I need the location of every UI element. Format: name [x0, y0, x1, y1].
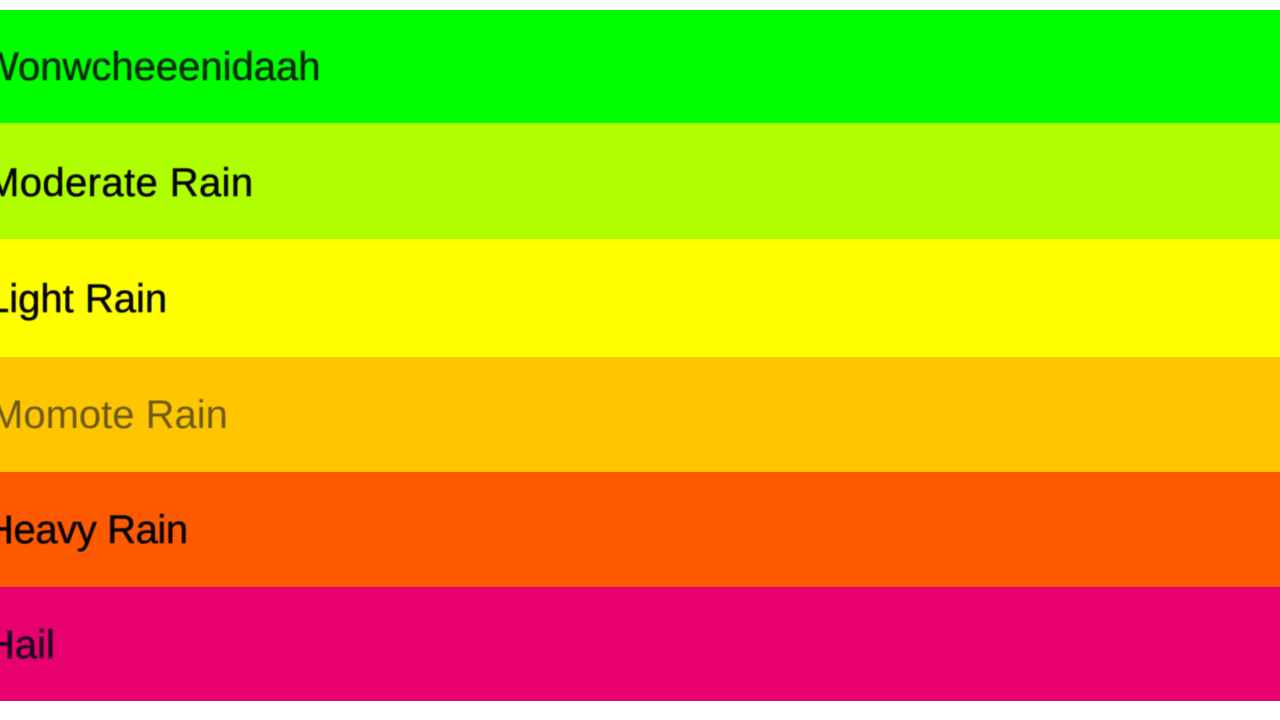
legend band: very light rain [0, 10, 1280, 123]
legend band: momote rain [0, 357, 1280, 472]
legend band: light rain [0, 239, 1280, 357]
legend band: heavy rain [0, 472, 1280, 587]
legend band: hail [0, 587, 1280, 701]
legend band: moderate rain [0, 123, 1280, 239]
